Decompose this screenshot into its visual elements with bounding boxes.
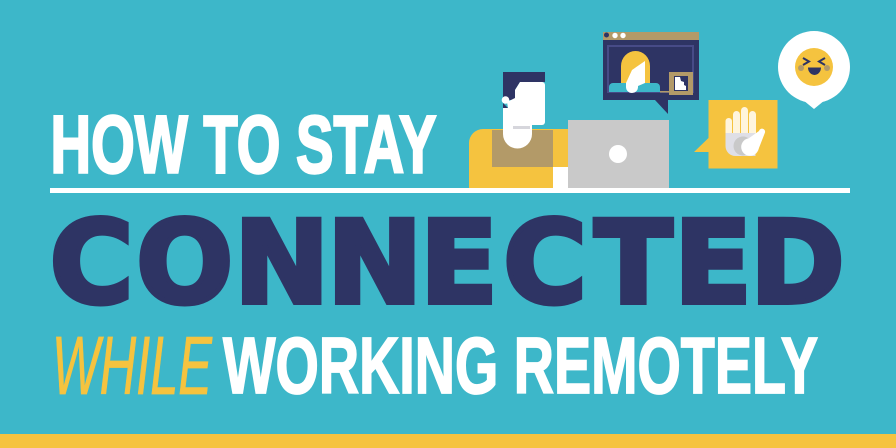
icon: emoji speech bubble [778, 31, 850, 109]
icon: yellow speech bubble with hand [694, 100, 778, 168]
heading: while: WHILE [52, 319, 213, 412]
bottom bar [0, 434, 896, 448]
heading: connected: CONNECTED [50, 196, 845, 330]
heading: how to stay: HOW TO STAY [50, 100, 436, 190]
icon: video call window [603, 32, 699, 114]
divider line [50, 188, 850, 193]
icon: person at laptop [469, 72, 669, 188]
